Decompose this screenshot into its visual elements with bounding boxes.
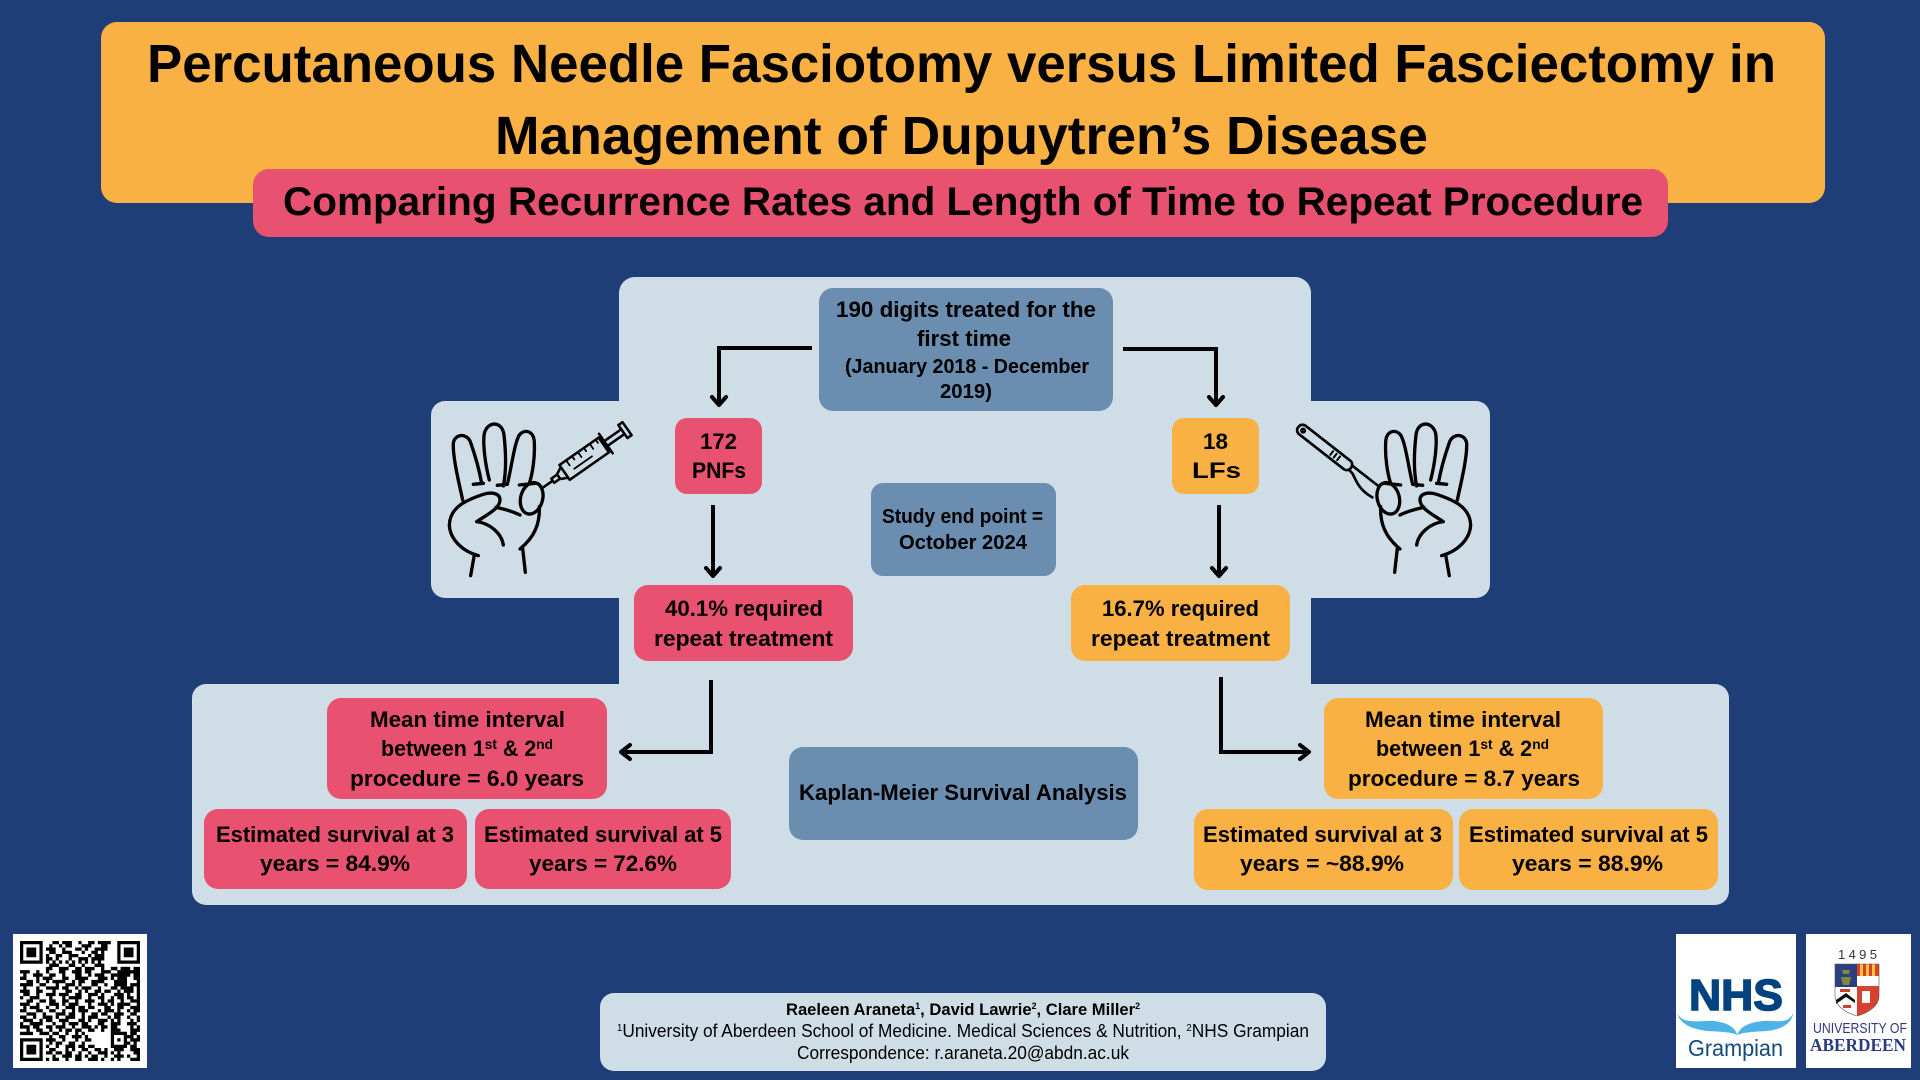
box: 40.1% repeat treatment (634, 585, 853, 661)
box: LF survival at 5 years: years = 88.9% (1512, 851, 1663, 876)
box: mean interval PNF (327, 698, 607, 799)
box: digits treated: (January 2018 - December (845, 356, 1089, 378)
authors and affiliations: 1 (915, 1001, 920, 1011)
panel: middle band background (431, 401, 1490, 598)
box: study end point: Study end point = (882, 506, 1043, 528)
box: 18 LFs (1172, 418, 1259, 494)
arrow: to LFs (1123, 349, 1223, 405)
box: 172 PNFs: 172 (700, 429, 737, 454)
box: PNF survival at 3 years: Estimated survival at 3 (216, 822, 454, 847)
box: 40.1% repeat treatment: repeat treatment (654, 626, 834, 651)
box: mean interval PNF: & 2 (497, 736, 536, 761)
subtitle banner (253, 169, 1668, 237)
box: mean interval PNF: between 1 (381, 736, 487, 761)
box: mean interval PNF: Mean time interval (370, 707, 565, 732)
title banner: Management of Dupuytren’s Disease (495, 106, 1428, 166)
arrow: left to mean interval (621, 680, 711, 759)
subtitle banner: Comparing Recurrence Rates and Length of Time to Repeat Procedure (283, 180, 1643, 224)
authors and affiliations: , Clare Miller (1037, 1000, 1135, 1019)
icon: hand with syringe (449, 419, 634, 576)
box: 16.7% repeat treatment: 16.7% required (1102, 596, 1259, 621)
box: mean interval PNF: st (485, 736, 497, 752)
arrow: LFs to repeat treatment (1212, 505, 1226, 576)
box: mean interval LF: & 2 (1493, 736, 1532, 761)
box: PNF survival at 5 years: Estimated survival at 5 (484, 822, 722, 847)
arrow: right to mean interval (1221, 677, 1309, 759)
box: 172 PNFs (675, 418, 762, 494)
box: LF survival at 5 years (1459, 809, 1718, 890)
box: LF survival at 3 years: years = ~88.9% (1240, 851, 1404, 876)
logo: NHS Grampian (1676, 934, 1796, 1068)
box: 172 PNFs: PNFs (692, 458, 746, 483)
authors and affiliations: 2 (1135, 1001, 1140, 1011)
authors and affiliations: University of Aberdeen School of Medicine. Medical Sciences & Nutrition, (622, 1021, 1186, 1041)
QR code (13, 934, 147, 1068)
QR code right-hand data modules (114, 969, 140, 1059)
icon: university crest (1835, 964, 1879, 1016)
box: mean interval LF: nd (1532, 736, 1549, 752)
box: LF survival at 5 years: Estimated survival at 5 (1469, 822, 1708, 847)
authors and affiliations: 1 (617, 1023, 623, 1034)
box: mean interval LF: Mean time interval (1365, 707, 1561, 732)
title banner (101, 22, 1825, 203)
title banner: Percutaneous Needle Fasciotomy versus Limited Fasciectomy in (147, 34, 1776, 94)
authors and affiliations: Raeleen Araneta (786, 1000, 919, 1019)
logo: University of Aberdeen: ABERDEEN (1810, 1035, 1906, 1055)
box: mean interval PNF: nd (536, 736, 553, 752)
box: 18 LFs: LFs (1192, 458, 1241, 483)
box: 18 LFs: 18 (1203, 429, 1228, 454)
authors and affiliations: , David Lawrie (920, 1000, 1032, 1019)
box: 40.1% repeat treatment: 40.1% required (665, 596, 823, 621)
box: Kaplan-Meier: Kaplan-Meier Survival Analysis (799, 780, 1127, 805)
box: digits treated (819, 288, 1113, 411)
box: 16.7% repeat treatment: repeat treatment (1091, 626, 1271, 651)
box: digits treated: 190 digits treated for the (836, 297, 1096, 322)
box: 16.7% repeat treatment (1071, 585, 1290, 661)
box: study end point: October 2024 (899, 532, 1028, 554)
box: mean interval LF: between 1 (1376, 736, 1482, 761)
arrow: PNFs to repeat treatment (706, 505, 720, 576)
box: digits treated: 2019) (940, 381, 992, 403)
box: PNF survival at 5 years: years = 72.6% (529, 851, 677, 876)
authors and affiliations: Correspondence: r.araneta.20@abdn.ac.uk (797, 1043, 1130, 1063)
icon: hand with scalpel (1292, 423, 1471, 576)
panel: centre flow background (619, 277, 1311, 905)
box: LF survival at 3 years (1194, 809, 1453, 890)
authors and affiliations: 2 (1032, 1001, 1037, 1011)
box: study end point (871, 483, 1056, 576)
logo: University of Aberdeen: 1495 (1838, 947, 1877, 962)
panel: bottom band background (192, 684, 1729, 905)
box: mean interval LF (1324, 698, 1603, 799)
box: mean interval PNF: procedure = 6.0 years (350, 766, 584, 791)
box: Kaplan-Meier (789, 747, 1138, 840)
logo: University of Aberdeen (1806, 934, 1911, 1068)
box: PNF survival at 5 years (475, 809, 731, 889)
box: digits treated: first time (917, 326, 1011, 351)
box: PNF survival at 3 years: years = 84.9% (260, 851, 410, 876)
box: mean interval LF: st (1480, 736, 1493, 752)
logo: NHS Grampian: NHS (1689, 971, 1783, 1020)
logo: NHS Grampian: Grampian (1688, 1035, 1783, 1061)
box: PNF survival at 3 years (204, 809, 467, 889)
authors and affiliations: NHS Grampian (1192, 1021, 1309, 1041)
box: LF survival at 3 years: Estimated survival at 3 (1203, 822, 1442, 847)
authors and affiliations: 2 (1186, 1023, 1192, 1034)
box: mean interval LF: procedure = 8.7 years (1348, 766, 1580, 791)
arrow: to PNFs (712, 348, 812, 405)
authors and affiliations (600, 993, 1326, 1071)
